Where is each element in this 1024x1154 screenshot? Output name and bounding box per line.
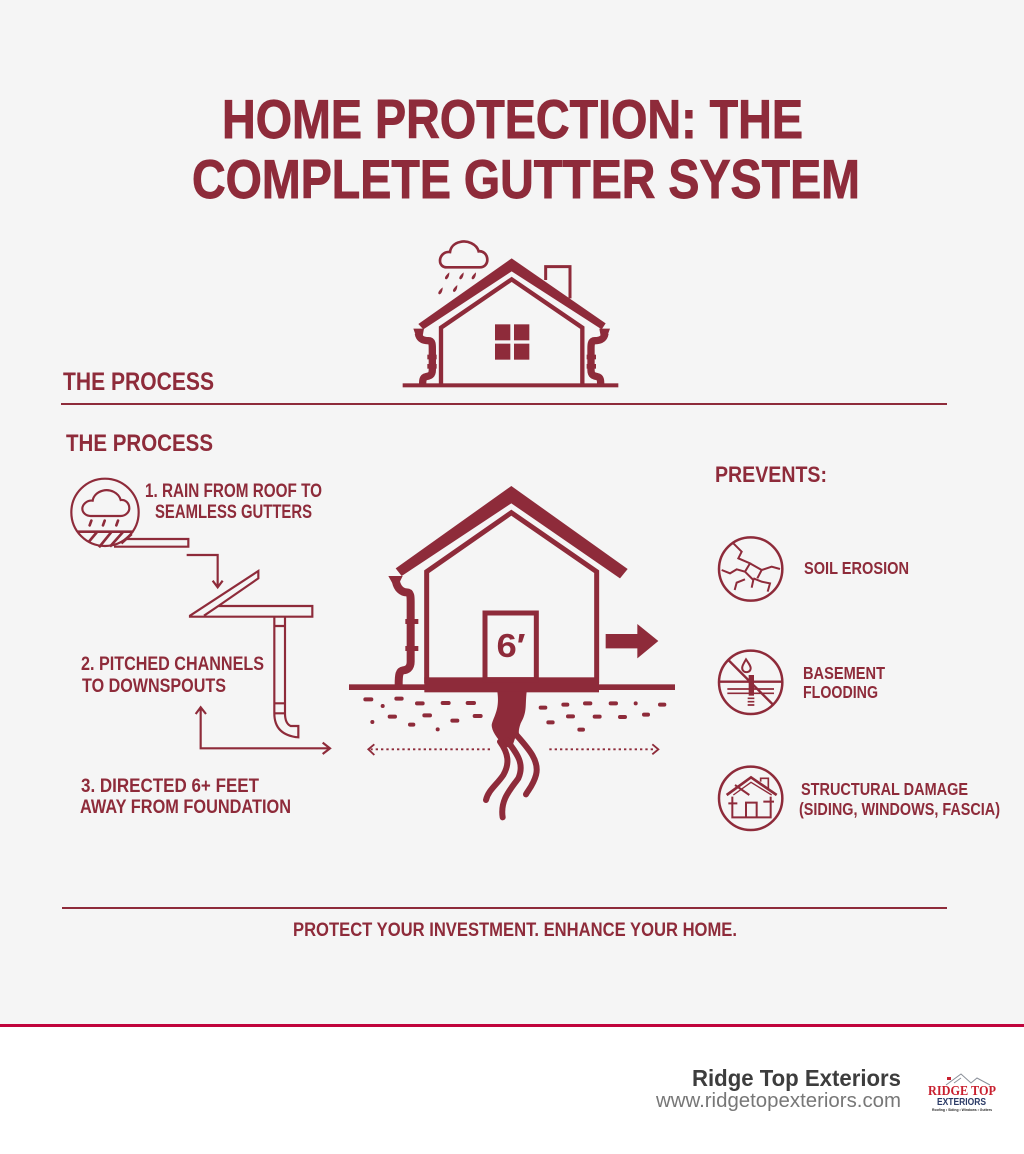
- company url: www.ridgetopexteriors.com: [655, 1090, 901, 1112]
- chart: house cross section with 6 foot discharge: [349, 486, 675, 817]
- arrow: L-shaped direction arrow: [196, 707, 330, 754]
- panel: prevents list: [719, 537, 1000, 830]
- company name: Ridge Top Exteriors: [692, 1065, 901, 1091]
- dotted distance arrows: [368, 744, 658, 755]
- icon: rain circle and gutter diagrams: [71, 479, 330, 754]
- step 2 text: 2. PITCHED CHANNELS: [81, 653, 264, 675]
- title: HOME PROTECTION: THE: [222, 88, 803, 150]
- icon: gutter channel: [190, 571, 312, 617]
- icon: soil erosion: [719, 537, 782, 601]
- icon: rain circle: [71, 479, 188, 547]
- heading: the process: THE PROCESS: [66, 430, 213, 457]
- structural damage label: STRUCTURAL DAMAGE: [801, 779, 968, 799]
- ground line: [349, 684, 675, 690]
- step 1 text: 1. RAIN FROM ROOF TO: [145, 480, 322, 502]
- icon: basement flooding: [719, 651, 782, 714]
- step 1 text: SEAMLESS GUTTERS: [155, 501, 312, 523]
- arrow: outward: [606, 624, 658, 658]
- walls: [427, 513, 597, 683]
- structural damage label: [799, 779, 1000, 819]
- right gutter and downspout: [587, 329, 610, 384]
- heading: prevents: PREVENTS:: [715, 462, 827, 487]
- icon: rain cloud: [438, 241, 487, 294]
- basement flooding label: [803, 663, 885, 702]
- footer: [0, 1024, 1024, 1154]
- logo: EXTERIORS: [937, 1097, 986, 1108]
- panel: process steps: [71, 479, 330, 818]
- basement flooding label: BASEMENT: [803, 663, 885, 683]
- water roots: [486, 692, 537, 817]
- foundation band: [424, 677, 599, 692]
- step 3 text: 3. DIRECTED 6+ FEET: [81, 775, 259, 797]
- step 2 text: TO DOWNSPOUTS: [82, 675, 226, 697]
- soil erosion label: SOIL EROSION: [804, 558, 909, 578]
- title: [192, 88, 860, 210]
- tagline: PROTECT YOUR INVESTMENT. ENHANCE YOUR HOME.: [293, 920, 737, 941]
- roof: [418, 258, 606, 329]
- icon: window: [495, 324, 529, 360]
- left gutter and downspout: [413, 329, 437, 384]
- walls: [441, 279, 582, 384]
- logo: Roofing • Siding • Windows • Gutters: [932, 1107, 993, 1112]
- icon: chimney: [546, 267, 570, 298]
- step 1 text: [145, 480, 322, 523]
- logo: RIDGE TOP: [928, 1084, 996, 1099]
- step 3 text: [80, 775, 291, 818]
- icon: house with gutters and rain cloud: [403, 241, 618, 387]
- icon: downspout: [274, 617, 298, 737]
- roof: [396, 486, 628, 578]
- title: COMPLETE GUTTER SYSTEM: [192, 148, 860, 210]
- arrow: down to gutter: [187, 555, 223, 587]
- basement flooding label: FLOODING: [803, 682, 878, 702]
- label: 6 foot: 6′: [496, 627, 526, 664]
- logo: [928, 1074, 996, 1112]
- soil particles: [365, 699, 664, 730]
- downspout: [388, 576, 418, 685]
- door frame: [485, 613, 536, 680]
- ground line: [403, 383, 618, 387]
- icon: structural damage: [719, 767, 782, 830]
- section label: the process: THE PROCESS: [63, 368, 214, 396]
- step 2 text: [81, 653, 264, 697]
- step 3 text: AWAY FROM FOUNDATION: [80, 796, 291, 818]
